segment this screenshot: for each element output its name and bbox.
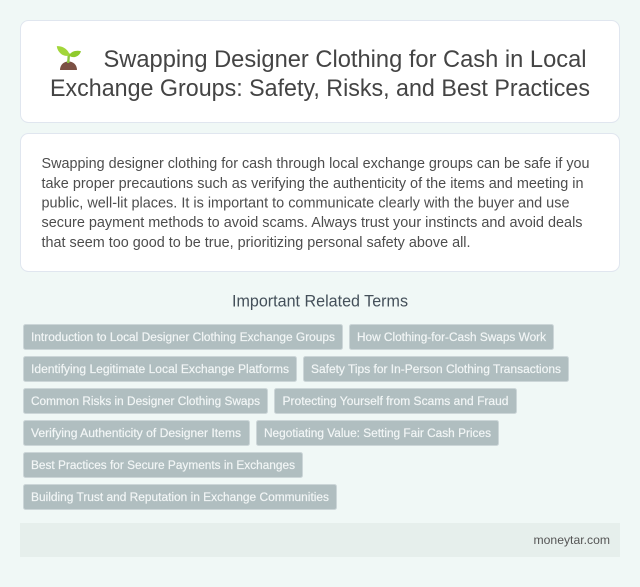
panel: summary <box>20 134 620 272</box>
footer <box>20 523 620 557</box>
tag: Identifying Legitimate Local Exchange Platforms <box>31 362 289 376</box>
tag <box>256 420 498 446</box>
summary text: that seem too good to be true, prioritizing personal safety above all. <box>42 234 470 251</box>
tag: Introduction to Local Designer Clothing Exchange Groups <box>31 330 335 344</box>
icon: seedling <box>57 46 81 70</box>
tag <box>274 388 516 414</box>
summary text <box>42 155 590 251</box>
tag: Protecting Yourself from Scams and Fraud <box>282 394 509 408</box>
tag: Common Risks in Designer Clothing Swaps <box>31 394 260 408</box>
title text: Exchange Groups: Safety, Risks, and Best Practices <box>50 75 590 102</box>
footer: moneytar.com <box>534 533 610 547</box>
tag <box>350 324 554 350</box>
summary text: secure payment methods to avoid scams. Always trust your instincts and avoid deals <box>42 214 582 231</box>
summary text: public, well-lit places. It is important to communicate clearly with the buyer and use <box>42 194 570 212</box>
panel: title <box>20 20 620 122</box>
tag: Building Trust and Reputation in Exchange Communities <box>31 490 329 504</box>
tag <box>24 324 342 350</box>
heading: related terms: Important Related Terms <box>232 292 408 310</box>
summary text: Swapping designer clothing for cash through local exchange groups can be safe if you <box>42 155 590 172</box>
tag: Safety Tips for In-Person Clothing Transactions <box>311 362 561 376</box>
tag <box>24 388 268 414</box>
tag <box>24 484 336 510</box>
tag: Best Practices for Secure Payments in Exchanges <box>31 458 295 472</box>
tag <box>24 452 302 478</box>
tag <box>304 356 568 382</box>
tag: Negotiating Value: Setting Fair Cash Prices <box>264 426 491 440</box>
title text <box>50 46 590 102</box>
tag <box>24 356 296 382</box>
tag: Verifying Authenticity of Designer Items <box>31 426 241 440</box>
tag: How Clothing-for-Cash Swaps Work <box>357 330 547 344</box>
tag list <box>24 324 568 510</box>
summary text: take proper precautions such as verifying the authenticity of the items and meeting in <box>42 175 584 192</box>
tag <box>24 420 250 446</box>
title text: Swapping Designer Clothing for Cash in Local <box>104 46 586 73</box>
